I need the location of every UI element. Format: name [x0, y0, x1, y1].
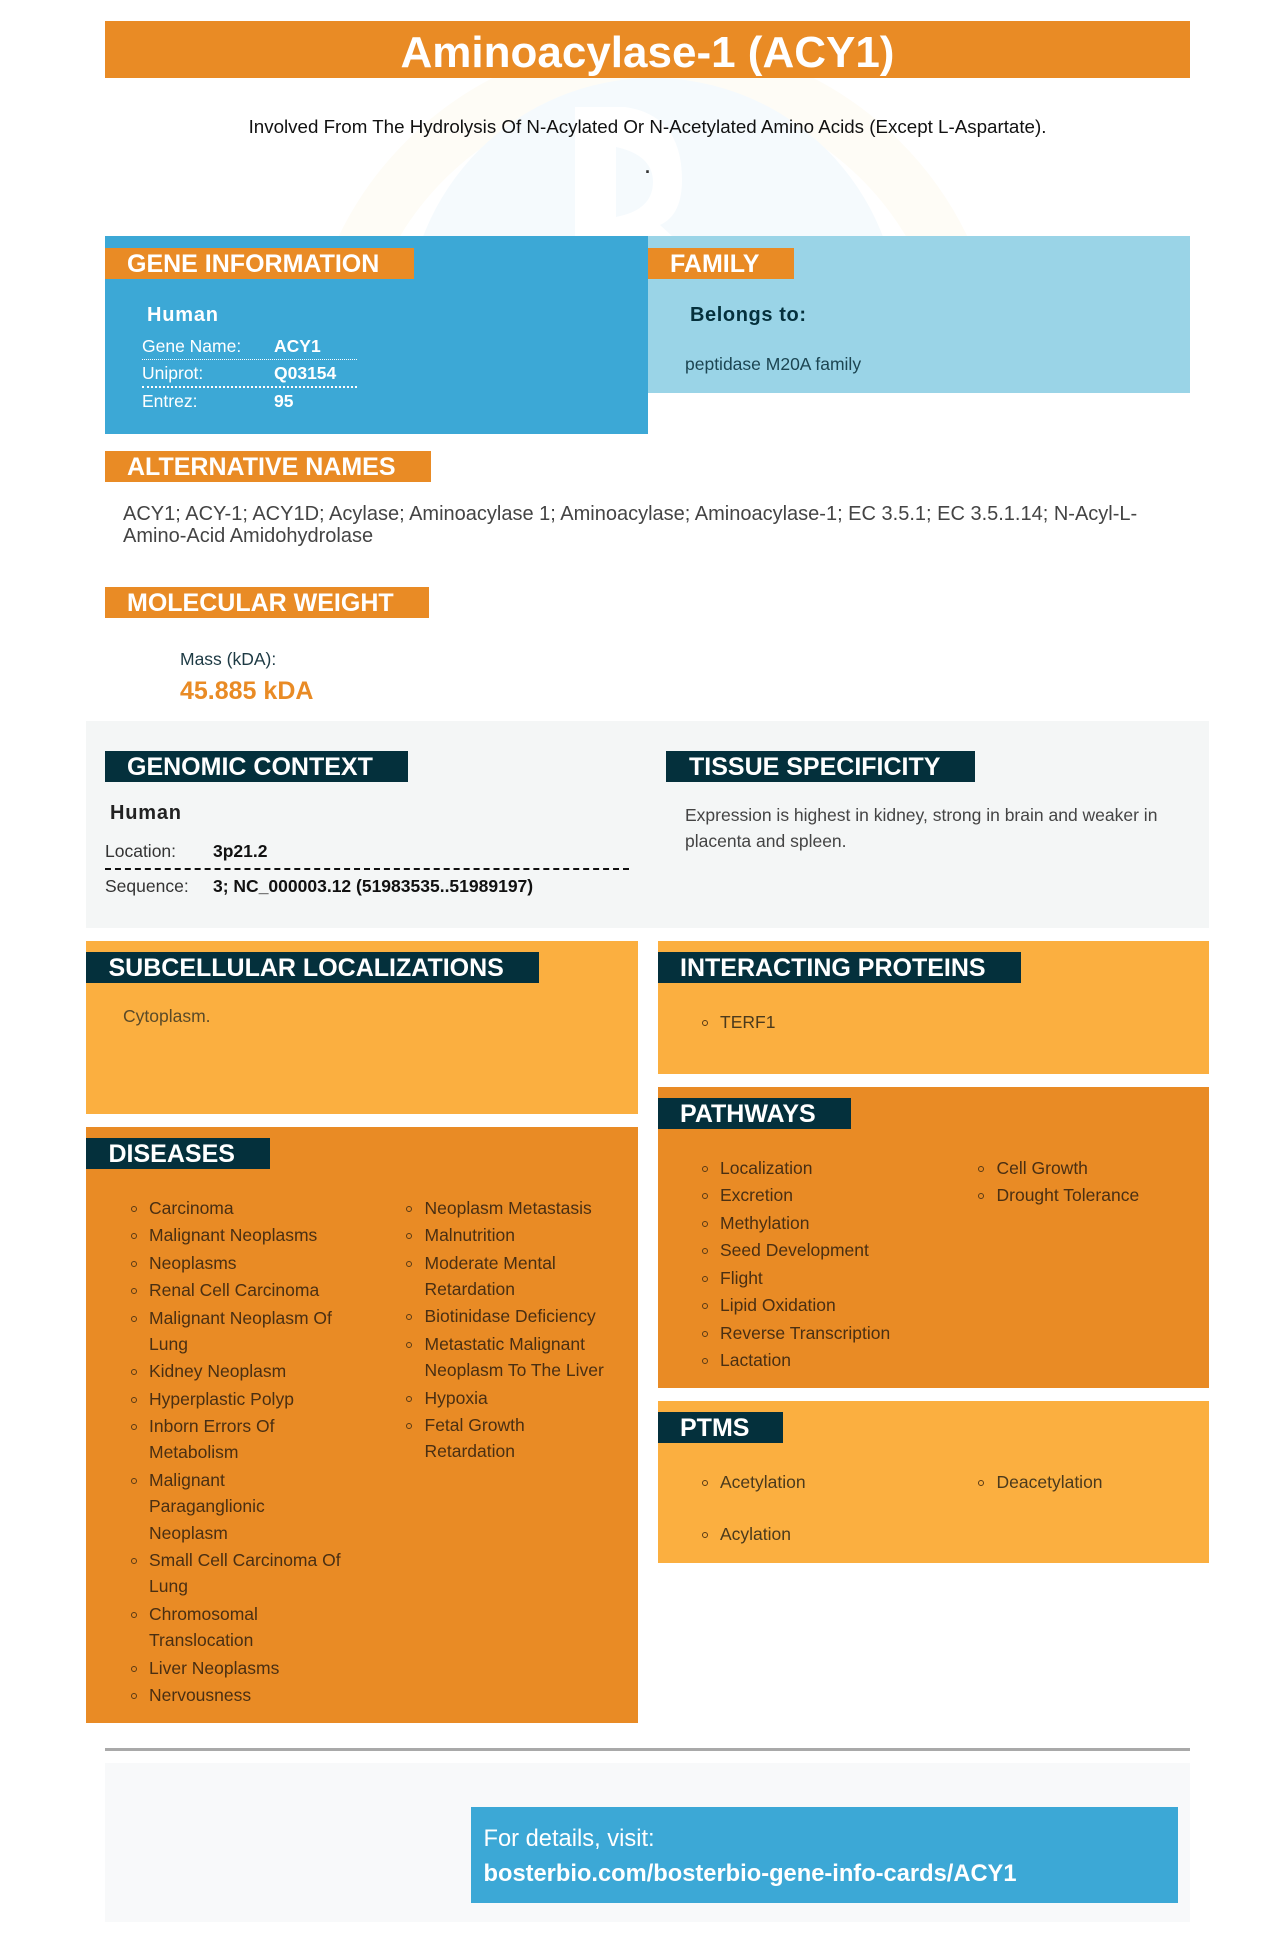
subtitle description: Involved From The Hydrolysis Of N-Acylated Or N-Acetylated Amino Acids (Except L-Aspartate). — [249, 116, 1046, 137]
disease list column 1: Chromosomal — [149, 1604, 258, 1624]
pathway list column 1: Lactation — [720, 1350, 791, 1370]
panel: footer — [105, 1763, 1190, 1922]
pathway list column 2: Cell Growth — [996, 1158, 1088, 1178]
uniprot row: Q03154 — [274, 363, 336, 383]
heading: subcellular localizations: SUBCELLULAR LOCALIZATIONS — [108, 954, 504, 982]
alternative names text: ACY1; ACY-1; ACY1D; Acylase; Aminoacylase 1; Aminoacylase; Aminoacylase-1; EC 3.5.1; EC 3.5.1.14; N-Acyl-L-Amino-Acid Amidohydrolase — [123, 503, 1137, 547]
callout: details link — [471, 1807, 1178, 1903]
localization text: Cytoplasm. — [123, 1006, 211, 1026]
details url: bosterbio.com/bosterbio-gene-info-cards/ACY1 — [484, 1861, 1017, 1887]
uniprot row: Uniprot: — [142, 363, 203, 383]
disease list column 1: Carcinoma — [149, 1198, 234, 1218]
disease list column 1 — [131, 1198, 341, 1705]
species label: Human — [110, 802, 182, 824]
heading: genomic context: GENOMIC CONTEXT — [127, 753, 373, 781]
panel: interacting proteins — [658, 941, 1209, 1074]
disease list column 2: Malnutrition — [424, 1225, 515, 1245]
ptm item: acylation: Acylation — [720, 1524, 791, 1544]
pathway list column 1: Flight — [720, 1268, 763, 1288]
heading: family: FAMILY — [670, 250, 759, 278]
disease list column 1: Small Cell Carcinoma Of — [149, 1550, 341, 1570]
panel: subcellular localizations — [86, 941, 638, 1114]
belongs to label: Belongs to: — [690, 304, 807, 326]
heading: pathways — [658, 1098, 851, 1129]
species label: Human — [147, 304, 219, 326]
disease list column 1: Metabolism — [149, 1442, 238, 1462]
pathway list column 1 — [702, 1158, 890, 1370]
panel: diseases — [86, 1127, 638, 1723]
heading: interacting proteins: INTERACTING PROTEINS — [680, 954, 986, 982]
panel: molecular weight — [105, 587, 429, 705]
disease list column 2: Fetal Growth — [424, 1415, 525, 1435]
pathway list column 1: Reverse Transcription — [720, 1323, 890, 1343]
disease list column 1: Lung — [149, 1576, 188, 1596]
family value: peptidase M20A family — [685, 354, 861, 374]
mass label: Mass (kDA): — [180, 649, 276, 669]
heading: molecular weight: MOLECULAR WEIGHT — [127, 589, 394, 617]
heading: ptms: PTMS — [680, 1414, 749, 1442]
disease list column 1: Paraganglionic — [149, 1496, 265, 1516]
disease list column 1: Neoplasms — [149, 1253, 237, 1273]
gene name row: ACY1 — [274, 336, 321, 356]
disease list column 1: Malignant Neoplasms — [149, 1225, 317, 1245]
details label: For details, visit: — [484, 1826, 655, 1852]
panel: genomic context and tissue specificity — [86, 721, 1209, 928]
disease list column 2 — [406, 1198, 604, 1461]
disease list column 2: Retardation — [424, 1279, 515, 1299]
disease list column 1: Renal Cell Carcinoma — [149, 1280, 319, 1300]
watermark logo — [339, 78, 967, 236]
title banner: Aminoacylase-1 (ACY1) — [401, 28, 894, 77]
heading: diseases — [86, 1138, 270, 1169]
uniprot row — [142, 360, 357, 388]
heading: diseases: DISEASES — [108, 1140, 235, 1168]
disease list column 2: Neoplasm Metastasis — [424, 1198, 592, 1218]
disease list column 1: Neoplasm — [149, 1523, 228, 1543]
disease list column 2: Metastatic Malignant — [424, 1334, 585, 1354]
gene name row — [142, 333, 357, 360]
pathway list column 1: Seed Development — [720, 1240, 869, 1260]
disease list column 1: Inborn Errors Of — [149, 1416, 274, 1436]
disease list column 1: Malignant — [149, 1470, 225, 1490]
pathway list column 2 — [978, 1158, 1139, 1205]
pathway list column 2: Drought Tolerance — [996, 1185, 1139, 1205]
disease list column 2: Neoplasm To The Liver — [424, 1360, 604, 1380]
entrez row: 95 — [274, 391, 293, 411]
entrez row — [142, 391, 293, 411]
title banner — [105, 21, 1190, 78]
ptm item: deacetylation: Deacetylation — [996, 1472, 1103, 1492]
pathway list column 1: Methylation — [720, 1213, 810, 1233]
dot separator: . — [645, 157, 650, 177]
disease list column 2: Moderate Mental — [424, 1253, 556, 1273]
pathway list column 1: Excretion — [720, 1185, 793, 1205]
panel: family — [648, 236, 1190, 393]
heading: gene information: GENE INFORMATION — [127, 250, 379, 278]
disease list column 2: Hypoxia — [424, 1388, 488, 1408]
disease list column 2: Biotinidase Deficiency — [424, 1306, 596, 1326]
heading: tissue specificity: TISSUE SPECIFICITY — [689, 753, 940, 781]
panel: gene information — [105, 236, 648, 434]
disease list column 1: Nervousness — [149, 1685, 251, 1705]
mass value: 45.885 kDA — [180, 677, 313, 705]
gene name row: Gene Name: — [142, 336, 241, 356]
disease list column 1: Hyperplastic Polyp — [149, 1389, 294, 1409]
panel: pathways — [658, 1087, 1209, 1388]
heading: ptms — [658, 1412, 783, 1443]
entrez row: Entrez: — [142, 391, 197, 411]
disease list column 1: Liver Neoplasms — [149, 1658, 279, 1678]
protein list item: TERF1 — [720, 1012, 775, 1032]
sequence row: 3; NC_000003.12 (51983535..51989197) — [213, 876, 533, 896]
location row: Location: — [105, 841, 176, 861]
heading: alternative names: ALTERNATIVE NAMES — [127, 453, 396, 481]
tissue specificity text: Expression is highest in kidney, strong in brain and weaker in placenta and spleen. — [685, 805, 1157, 851]
heading: pathways: PATHWAYS — [680, 1100, 816, 1128]
pathway list column 1: Lipid Oxidation — [720, 1295, 836, 1315]
panel: alternative names — [105, 451, 1137, 547]
heading: family — [648, 248, 794, 279]
location row: 3p21.2 — [213, 841, 267, 861]
disease list column 1: Translocation — [149, 1630, 253, 1650]
pathway list column 1: Localization — [720, 1158, 812, 1178]
ptm item: acetylation: Acetylation — [720, 1472, 806, 1492]
disease list column 1: Malignant Neoplasm Of — [149, 1308, 332, 1328]
panel: ptms — [658, 1401, 1209, 1563]
disease list column 2: Retardation — [424, 1441, 515, 1461]
disease list column 1: Lung — [149, 1334, 188, 1354]
location row — [105, 838, 629, 870]
disease list column 1: Kidney Neoplasm — [149, 1361, 286, 1381]
sequence row: Sequence: — [105, 876, 189, 896]
